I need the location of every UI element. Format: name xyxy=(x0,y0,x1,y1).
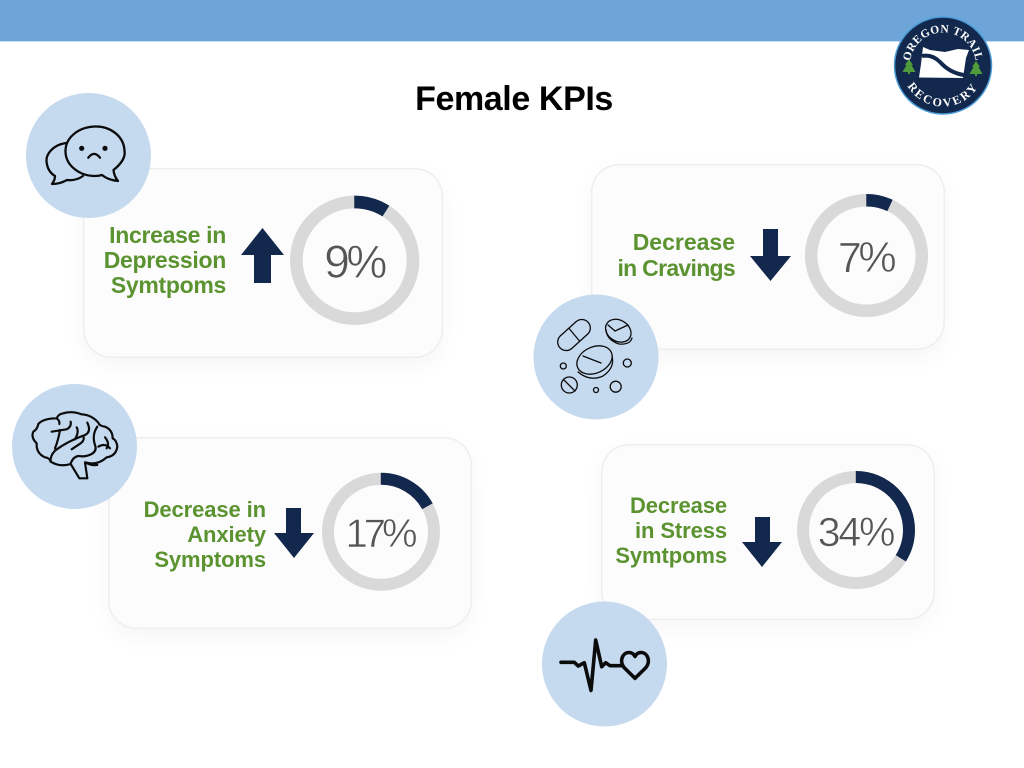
panel: decrease in cravings xyxy=(591,164,945,350)
panel: decrease in anxiety symptoms xyxy=(108,437,472,629)
label: decrease in anxiety: Symptoms xyxy=(154,547,266,572)
logo: tree right xyxy=(970,61,982,76)
label: decrease in stress: Decrease xyxy=(630,493,727,518)
donut chart: 17% xyxy=(328,479,434,585)
label: decrease in cravings: in Cravings xyxy=(617,255,735,281)
label: decrease in stress: Symtpoms xyxy=(615,543,727,568)
donut chart: 9% xyxy=(296,202,413,319)
value: 9%: 9% xyxy=(324,236,386,288)
icon: pills xyxy=(534,294,658,420)
arrow: down xyxy=(742,517,782,567)
icon: sad chat bubbles xyxy=(26,93,151,218)
label: decrease in cravings: Decrease xyxy=(633,229,735,255)
label: increase in depression: Symtpoms xyxy=(111,272,226,298)
logo: arc text bottom: RECOVERY xyxy=(907,82,976,106)
arrow: up xyxy=(241,228,284,283)
header band xyxy=(0,0,1024,42)
logo: state outline with river xyxy=(919,47,969,78)
logo: tree left xyxy=(902,59,916,74)
label: increase in depression: Increase in xyxy=(109,222,226,248)
donut chart: 34% xyxy=(803,477,909,583)
arrow: down xyxy=(750,229,791,281)
label: increase in depression: Depression xyxy=(104,247,226,273)
panel: increase in depression symptoms xyxy=(83,168,443,358)
value: 34%: 34% xyxy=(818,509,894,555)
arrow: down xyxy=(274,508,314,558)
value: 7%: 7% xyxy=(838,234,895,282)
icon: brain xyxy=(12,384,137,509)
label: decrease in anxiety: Anxiety xyxy=(187,522,267,547)
logo: arc text top: OREGON TRAIL xyxy=(904,24,982,60)
logo: Oregon Trail Recovery badge xyxy=(894,16,992,115)
title: Female KPIs xyxy=(415,80,613,118)
donut chart: 7% xyxy=(811,200,922,311)
icon: heartbeat xyxy=(542,602,667,726)
label: decrease in anxiety: Decrease in xyxy=(144,497,266,522)
label: decrease in stress: in Stress xyxy=(635,518,727,543)
panel: decrease in stress symptoms xyxy=(601,444,935,620)
value: 17%: 17% xyxy=(345,512,417,556)
